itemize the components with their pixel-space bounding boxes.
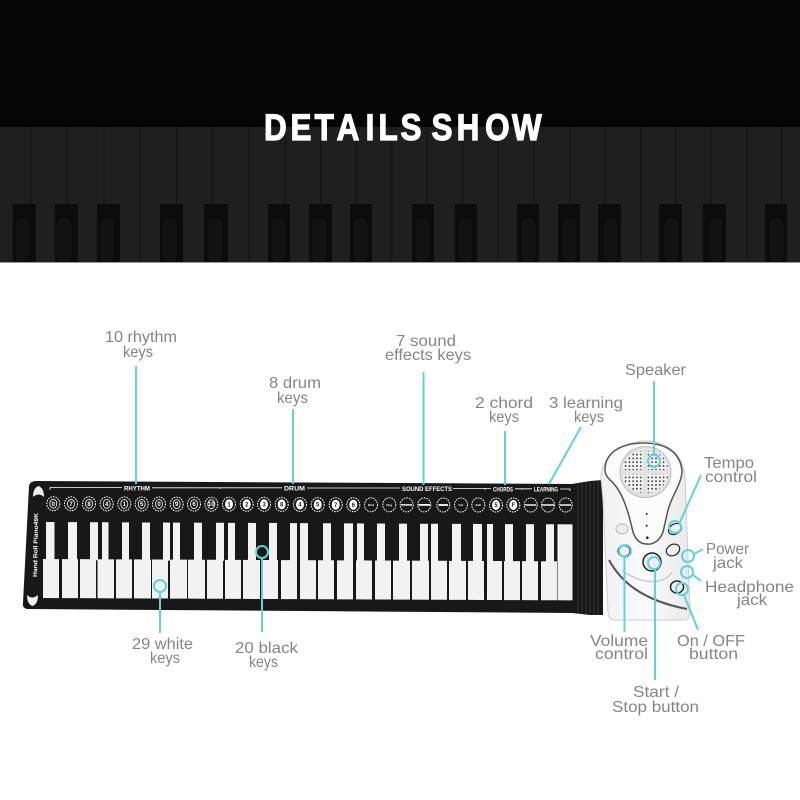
callout: start / stop button: [612, 557, 699, 716]
callout: 8 drum keys: 8 drum: [269, 375, 321, 392]
callout: start / stop button: Stop button: [612, 699, 699, 716]
callout: 10 rhythm keys: 10 rhythm: [105, 329, 177, 346]
callout: 3 learning keys: keys: [574, 409, 604, 426]
callout: speaker: [625, 362, 687, 467]
callout: 3 learning keys: 3 learning: [549, 395, 623, 412]
sound effects buttons: Dog: [386, 503, 392, 507]
rhythm buttons: 8: [87, 502, 91, 508]
callout: volume control: [590, 545, 648, 663]
callout: 20 black keys: keys: [249, 654, 278, 671]
callout: 2 chord keys: [475, 395, 533, 485]
callout: tempo control: [669, 455, 757, 533]
sound effects buttons: [364, 498, 485, 512]
rhythm buttons: 0: [157, 502, 161, 508]
callout: 3 learning keys: [549, 395, 623, 484]
model name: Hand Roll Piano49K: [33, 512, 40, 577]
title: DETAILS SHOW: [264, 108, 542, 149]
drum buttons: 2: [245, 502, 249, 508]
callout: on / off button: [676, 583, 745, 663]
rhythm buttons: 1: [123, 502, 127, 508]
section headers: CHORDS: [493, 488, 513, 494]
callout: 8 drum keys: [269, 375, 321, 484]
callout: headphone jack: Headphone: [705, 579, 794, 596]
unit body: [601, 441, 690, 620]
header banner: dark piano keys: [0, 0, 800, 263]
section headers: DRUM: [284, 486, 305, 492]
chord buttons: 5: [494, 503, 498, 509]
callout: 29 white keys: [132, 580, 193, 667]
tempo button: [666, 521, 684, 537]
rhythm buttons: 6: [192, 502, 196, 508]
callout: start / stop button: Start /: [633, 684, 680, 701]
drum buttons: 8: [280, 502, 284, 508]
rhythm side button: [616, 524, 628, 534]
section headers: LEARNING: [534, 488, 558, 494]
swoosh: [609, 560, 687, 609]
learning buttons: [524, 498, 572, 512]
callout: headphone jack: [681, 566, 794, 609]
indicator dots: [646, 513, 649, 539]
drum buttons: 4: [298, 503, 302, 509]
callout: speaker: Speaker: [625, 362, 687, 379]
callout: volume control: Volume: [590, 633, 648, 650]
callout: 7 sound effects keys: effects keys: [385, 347, 471, 364]
sound effects buttons: Bird: [368, 503, 374, 507]
callout: 2 chord keys: keys: [489, 409, 519, 426]
section headers: [50, 486, 570, 494]
rhythm buttons: 9: [175, 502, 179, 508]
callout: 29 white keys: 29 white: [132, 636, 193, 653]
rhythm buttons: 10: [208, 502, 215, 508]
roll-up piano keyboard: [23, 480, 603, 615]
callout: 20 black keys: [235, 546, 299, 671]
rhythm buttons: 7: [69, 502, 73, 508]
chord buttons: F: [511, 503, 515, 509]
chord buttons: [490, 498, 520, 512]
callout: 8 drum keys: keys: [277, 390, 308, 407]
rhythm buttons: [47, 497, 218, 511]
callout: power jack: Power: [706, 541, 750, 558]
section headers: SOUND EFFECTS: [402, 487, 452, 493]
callout: 2 chord keys: 2 chord: [475, 395, 533, 412]
callout: 7 sound effects keys: 7 sound: [396, 333, 456, 350]
drum buttons: 6: [352, 503, 356, 509]
callout: 7 sound effects keys: [385, 333, 471, 485]
end cap icons: [27, 486, 44, 606]
drum buttons: 7: [334, 503, 338, 509]
start button: [643, 553, 661, 571]
rolled mat ribs: [578, 481, 598, 615]
second tempo button: [664, 542, 682, 558]
callout: on / off button: button: [689, 646, 738, 663]
callout: on / off button: On / OFF: [677, 633, 745, 650]
drum buttons: 5: [316, 503, 320, 509]
rhythm buttons: 0: [52, 502, 56, 508]
callout: 29 white keys: keys: [150, 650, 180, 667]
drum buttons: 3: [262, 502, 266, 508]
section headers: RHYTHM: [124, 486, 150, 492]
callout: tempo control: Tempo: [704, 455, 754, 472]
callout: tempo control: control: [705, 469, 757, 486]
volume button: [618, 546, 630, 556]
head and centre panel outline: [605, 443, 682, 544]
callout: 10 rhythm keys: [105, 329, 177, 484]
drum buttons: 1: [227, 502, 231, 508]
rhythm buttons: 5: [140, 502, 144, 508]
callout: 20 black keys: 20 black: [235, 640, 299, 657]
callout: power jack: [682, 541, 750, 572]
sound effects buttons: Car: [458, 503, 464, 507]
callout: 10 rhythm keys: keys: [123, 344, 153, 361]
drum buttons: [222, 497, 360, 512]
callout: volume control: control: [595, 646, 648, 663]
control unit: [601, 441, 690, 620]
sound effects buttons: Bell: [476, 503, 481, 507]
speaker: [620, 446, 671, 498]
rhythm buttons: 4: [105, 502, 109, 508]
callout: power jack: jack: [712, 555, 744, 572]
callout: headphone jack: jack: [736, 592, 768, 609]
white keys: [43, 522, 572, 600]
power button: [670, 581, 684, 593]
keyboard mat: [23, 480, 603, 615]
